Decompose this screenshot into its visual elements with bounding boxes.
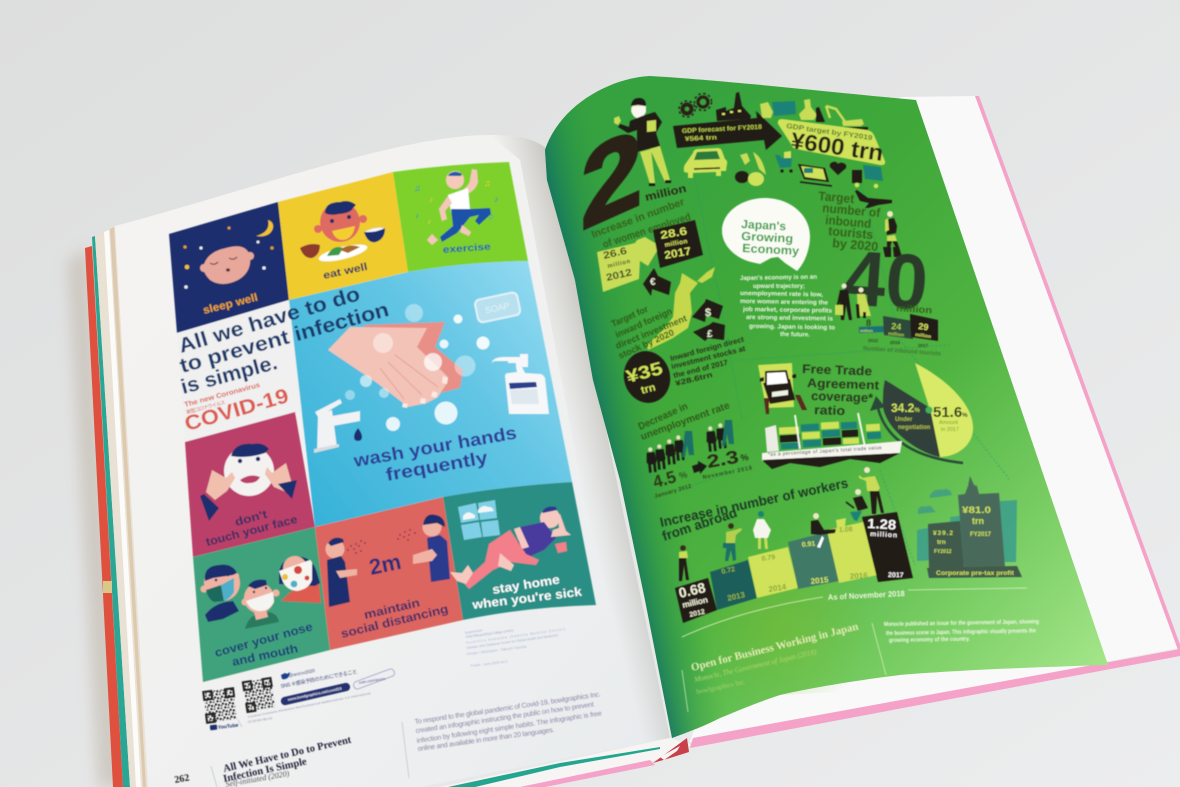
icon: washing hands	[328, 322, 463, 408]
licence text: CC BY-NC-ND 4.0	[248, 716, 273, 724]
text block: economy summary: unemployment rate is low,	[740, 290, 823, 298]
icon: container ship: *as a percentage of Japan's total trade value	[768, 445, 882, 458]
icon: shopping cart	[775, 151, 793, 173]
icon: music notes	[414, 178, 498, 226]
GDP target box: ¥600 trn	[789, 127, 885, 166]
bar chart: foreign workers: 0.68	[677, 579, 707, 601]
GDP target box	[778, 119, 885, 166]
icon: factory	[716, 92, 751, 121]
icon: car	[684, 148, 727, 178]
stat box: 26.6 million 2012: million	[607, 259, 631, 270]
stat: 4.5% to 2.3%	[651, 447, 752, 500]
big number: 2 million: 2	[581, 105, 642, 254]
stat box: 28.6 million 2017: million	[664, 238, 688, 249]
pie chart: negotiation	[898, 425, 931, 431]
panel: maintain social distancing	[315, 497, 463, 650]
heading: Free Trade Agreement: Agreement	[807, 376, 880, 393]
caption: foreign investment	[610, 304, 688, 361]
caption paragraph: To respond to the global pandemic of Covid-19, bowlgraphics Inc.	[414, 691, 601, 726]
stat: 4.5% to 2.3%: %	[678, 469, 688, 481]
swoosh arrow	[870, 396, 963, 463]
stat: 4.5% to 2.3%: %	[740, 452, 749, 463]
corporate profit city chart: FY2012	[934, 549, 952, 555]
inbound tourist stats: million	[860, 328, 873, 333]
icon: soap bubbles	[345, 304, 490, 431]
inbound tourist stats: 2017	[918, 343, 929, 348]
icon: truck front view	[758, 363, 807, 414]
corporate profit city chart: trn	[972, 516, 984, 526]
text block: economy summary: the future.	[780, 331, 810, 339]
heading: workers from abroad: from abroad	[660, 505, 739, 544]
text: inward stocks: ¥28.6trn	[674, 370, 714, 388]
icon: excavator	[826, 106, 868, 130]
heading: unemployment: Decrease in	[637, 401, 690, 433]
distance label: 2m	[367, 549, 403, 580]
heading: inbound tourists: Target	[818, 189, 856, 206]
covid label: The new Coronavirus	[184, 382, 261, 409]
stat box: 28.6 million 2017: 28.6	[659, 225, 688, 242]
arrow: GDP forecast: ¥564 trn	[685, 134, 717, 143]
big number: 40 million: million	[896, 303, 933, 317]
label: touch your face	[205, 514, 299, 549]
label: wash your hands	[351, 423, 518, 471]
big number: 2 million: million	[644, 183, 688, 204]
droplet dots	[347, 529, 416, 554]
icons: currency arrows: $	[705, 307, 711, 319]
label: don't	[234, 509, 269, 529]
text block: economy summary: are strong and investment is	[746, 314, 834, 323]
panel: white title block	[177, 300, 302, 442]
inbound tourist stats: 24	[891, 321, 902, 332]
pie chart: 51.6%	[933, 404, 968, 421]
text block: economy summary: job market, corporate profits	[742, 306, 833, 315]
heading: workers from abroad: Increase in number of workers	[659, 475, 849, 530]
corporate profit city chart: ¥81.0	[962, 505, 991, 515]
stat: 4.5% to 2.3%: January 2012	[654, 484, 692, 500]
badge: ¥35 trn	[618, 346, 676, 408]
text: inward stocks: the end of 2017	[672, 358, 729, 380]
left page	[115, 135, 670, 787]
heading: All we have to do	[176, 282, 363, 358]
stat box: 28.6 million 2017: 2017	[663, 245, 692, 262]
stat: 4.5% to 2.3%: 4.5	[651, 467, 678, 492]
heading: inbound tourists: tourists	[828, 224, 874, 242]
icon: plane	[855, 190, 892, 208]
icon: right person	[413, 514, 450, 582]
supervision text: Kenji Shibuya (King's College London)	[466, 628, 514, 639]
caption: foreign investment: direct investment	[614, 313, 688, 351]
caption paragraph: infection by following eight simple habits. The infographic is free	[416, 710, 602, 745]
stat: 4.5% to 2.3%: November 2018	[702, 466, 752, 481]
inbound tourist stats: 2016	[890, 340, 901, 345]
social links: www.bowlgraphics.net/covid19	[286, 687, 342, 702]
icon: container ship	[762, 413, 902, 469]
supervision text	[465, 627, 565, 668]
caption: foreign investment: stock by 2020	[617, 327, 676, 361]
icon: pump bottle	[492, 354, 549, 414]
stat box: 26.6 million 2012	[597, 237, 660, 292]
icon: forklift and crate	[760, 101, 796, 118]
icon: music notes: ♪	[494, 194, 498, 204]
icon: sleeping face	[200, 246, 254, 284]
icon: music notes: ♪	[429, 195, 433, 204]
bar chart: foreign workers: 1.08	[839, 526, 853, 534]
bar chart: foreign workers: 2013	[726, 590, 746, 603]
stat box: 26.6 million 2012: 2012	[605, 267, 634, 284]
bar chart: foreign workers	[675, 512, 913, 623]
caption paragraph: online and available in more than 20 languages.	[417, 727, 555, 753]
icon: music notes: ♫	[488, 212, 494, 221]
badge: ¥35 trn: trn	[640, 381, 657, 397]
supervision text: Nanako Mori (National Center for Global Health and Medicine)	[467, 633, 558, 650]
icon: face with hands	[200, 444, 297, 521]
corporate profit city chart: FY2017	[970, 532, 992, 538]
label: stay home	[491, 572, 561, 597]
icons: workers on bars	[679, 467, 884, 581]
supervision text: Yoshihiro Kawaoka (Kameda Medical Center)	[466, 627, 565, 645]
panel: sleep well	[169, 202, 289, 333]
panel: wash your hands	[289, 261, 572, 527]
arrow: GDP forecast: GDP forecast for FY2018	[682, 124, 762, 135]
label: sleep well	[202, 292, 259, 317]
caption: foreign investment: inward foreign	[614, 306, 674, 340]
supervision text: Design / Illustration : Takeshi Tokuma	[467, 645, 527, 656]
label: and mouth	[231, 641, 299, 669]
icon: truck	[852, 165, 883, 188]
bar chart: foreign workers: million	[681, 594, 709, 610]
label: when you're sick	[471, 585, 583, 612]
panel: eat well	[278, 172, 408, 300]
bar chart: foreign workers: million	[870, 531, 897, 539]
text block: Monocle description: the business scene in Japan. This infographic visually presents the	[886, 628, 1037, 637]
panel: don't touch your face	[185, 412, 315, 557]
bar chart: foreign workers: 2012	[689, 609, 706, 619]
icon: masked man	[200, 565, 240, 622]
bubble: Japan's Growing Economy: Economy	[742, 241, 800, 258]
icon: meal	[300, 228, 385, 265]
stat box: 28.6 million 2017	[653, 220, 703, 268]
icon: soap	[474, 292, 521, 323]
heading: unemployment: unemployment rate	[639, 400, 732, 443]
inbound tourist stats: 29	[918, 321, 929, 332]
social links: note.com/anzov	[359, 677, 386, 685]
social links	[280, 667, 394, 705]
inbound tourist stats: 8	[866, 318, 871, 328]
big number: 40 million: 40	[841, 233, 931, 327]
icon: music notes: ♪	[427, 217, 431, 226]
icon: laptop	[798, 164, 832, 186]
bubble: Japan's Growing Economy: Japan's	[741, 217, 787, 233]
pie chart: 34.2%	[891, 401, 920, 415]
icon: faucet	[314, 399, 362, 453]
icon: flask	[799, 99, 825, 122]
women employed caption: of women employed	[601, 211, 692, 251]
supervision text: Supervision	[465, 628, 483, 635]
text block: Monocle description: growing economy of the country.	[889, 637, 970, 644]
right page: green infographic	[545, 76, 1108, 738]
licence text: Creative Commons Attribution-NonCommercial-NoDerivatives 4.0 International	[247, 691, 371, 719]
corporate profit city chart: ¥39.2	[933, 530, 953, 537]
page footer: poster credits and caption	[174, 627, 602, 787]
heading: to prevent infection	[177, 298, 391, 378]
icon: woman with mask	[614, 98, 671, 186]
caption paragraph	[414, 691, 602, 753]
heading: inbound tourists: inbound	[825, 213, 872, 231]
heading: Free Trade Agreement: ratio	[814, 403, 846, 418]
label: maintain	[363, 595, 421, 622]
bar chart: foreign workers: 0.72	[721, 566, 736, 576]
badge: ¥35 trn: ¥35	[624, 358, 665, 387]
text block: economy summary	[740, 274, 835, 339]
icon: gears	[679, 94, 712, 117]
heading: is simple.	[178, 351, 280, 399]
women employed caption: Increase in number	[590, 196, 686, 241]
stat: 4.5% to 2.3%: 2.3	[705, 447, 740, 472]
work title: All We Have to Do to Prevent	[222, 735, 353, 775]
date line	[682, 588, 1027, 637]
panel: stay home	[443, 482, 596, 620]
date line: As of November 2018	[828, 589, 906, 602]
label: eat well	[322, 261, 369, 282]
inbound tourist stats: million	[888, 331, 904, 339]
icons: currency arrows	[643, 268, 725, 341]
bar chart: foreign workers: 2016	[850, 571, 868, 581]
inbound tourist stats: million	[915, 332, 932, 340]
poster: All we have to do	[169, 162, 596, 682]
arrow: GDP forecast	[673, 111, 782, 150]
panel: cover your nose and mouth	[193, 527, 330, 682]
icon: resting person	[450, 507, 571, 589]
inbound tourist stats: 2012	[868, 338, 879, 343]
label: cover your nose	[213, 619, 314, 660]
page number: 262	[174, 773, 190, 786]
text block: economy summary: upward trajectory;	[753, 283, 805, 290]
gutter shadow	[490, 135, 670, 745]
dashed dividers	[626, 180, 1010, 565]
label: exercise	[442, 242, 492, 256]
map of Japan	[647, 267, 715, 350]
text: inward stocks	[669, 334, 747, 388]
pie chart: in 2017	[941, 427, 959, 433]
icon: heart	[830, 162, 846, 175]
icon: soap: SOAP	[484, 300, 510, 315]
heading: inbound tourists: number of	[822, 201, 882, 220]
bar chart: foreign workers: 2015	[810, 575, 829, 586]
youtube label: YouTube	[218, 722, 239, 731]
corporate profit city chart: Corporate pre-tax profit	[936, 570, 1015, 577]
heading: Free Trade Agreement	[802, 362, 880, 418]
pie chart: Under	[895, 417, 913, 423]
icon: eating face	[314, 201, 367, 242]
icon: workers 2018	[705, 420, 734, 452]
icon: music notes: ♫	[414, 183, 421, 193]
icon: masked boy	[242, 580, 280, 629]
caption paragraph: created an infographic instructing the public on how to prevent	[415, 701, 594, 735]
text block: economy summary: more women are entering the	[740, 298, 829, 307]
pie chart: Amount	[939, 420, 958, 426]
bubble: Japan's Growing Economy	[722, 198, 810, 271]
icon: music notes: ♪	[415, 211, 419, 220]
book shadow on table	[68, 248, 125, 787]
icon: masked woman	[279, 556, 321, 603]
icon: window	[458, 500, 500, 540]
icon: left person	[326, 538, 357, 607]
text block: economy summary: Japan's economy is on an	[740, 274, 817, 282]
bar chart: foreign workers: 0.79	[761, 554, 776, 563]
big number: 2 million	[581, 105, 688, 254]
bubble: Japan's Growing Economy: Growing	[741, 229, 794, 246]
heading: inbound tourists	[818, 189, 882, 254]
covid label: 新型コロナウイルス	[186, 399, 226, 416]
caption: foreign investment: Target for	[610, 304, 650, 329]
text block: economy summary: growing. Japan is looking to	[749, 323, 835, 332]
heading: inbound tourists: by 2020	[832, 236, 879, 254]
icon: fruit and rice	[735, 152, 766, 186]
panel: wash your hands: frequently	[384, 447, 489, 485]
work title: Open for Business: Monocle, The Government of Japan (2018)	[692, 647, 818, 684]
work title: Infection Is Simple	[222, 756, 308, 785]
inbound tourist stats	[859, 314, 942, 357]
icon: workers 2012	[645, 431, 694, 473]
corporate profit city chart: trn	[937, 539, 946, 546]
GDP target box: GDP target by FY2019	[786, 123, 873, 142]
bar chart: foreign workers: 0.91	[801, 541, 816, 549]
heading	[176, 282, 391, 399]
panel: exercise	[393, 162, 528, 272]
icon: music notes: ♫	[484, 178, 491, 188]
social links: @anzov2020	[288, 668, 316, 678]
inbound tourist stats: Number of inbound tourists	[863, 346, 942, 357]
text: inward stocks: Inward foreign direct	[669, 334, 745, 363]
covid label: COVID-19	[182, 384, 291, 436]
label	[471, 572, 583, 612]
label: social distancing	[339, 602, 450, 641]
text block: Monocle description	[884, 619, 1039, 644]
social links: SNS ＃感染予防のためにできること	[280, 667, 358, 690]
corporate profit city chart	[917, 476, 1022, 578]
supervision text: Poster : June 2020 ver.3	[471, 660, 508, 668]
bar chart: foreign workers: 2014	[768, 582, 787, 594]
heading: Free Trade Agreement: coverage*	[811, 389, 873, 405]
icon: moon and stars	[183, 220, 274, 289]
icon: tourist	[883, 211, 902, 257]
icon: dancing figure	[427, 169, 491, 245]
bar chart: foreign workers: 2017	[888, 572, 904, 579]
work title: Open for Business: Open for Business Working in Japan	[690, 621, 860, 674]
stat box: 26.6 million 2012: 26.6	[602, 246, 629, 262]
icon: family of tourists	[835, 284, 871, 320]
text block: Monocle description: Monocle published an issue for the government of Japan, showing	[884, 619, 1039, 628]
work title: Open for Business: bowlgraphics Inc.	[696, 678, 747, 696]
icons: currency arrows: £	[707, 329, 713, 340]
icons: currency arrows: €	[650, 277, 656, 288]
text: inward stocks: investment stocks at	[670, 344, 747, 371]
heading: Free Trade Agreement: Free Trade	[802, 362, 872, 378]
QR codes	[203, 678, 275, 723]
bar chart: foreign workers: 1.28	[867, 516, 897, 533]
pie chart	[883, 363, 973, 457]
